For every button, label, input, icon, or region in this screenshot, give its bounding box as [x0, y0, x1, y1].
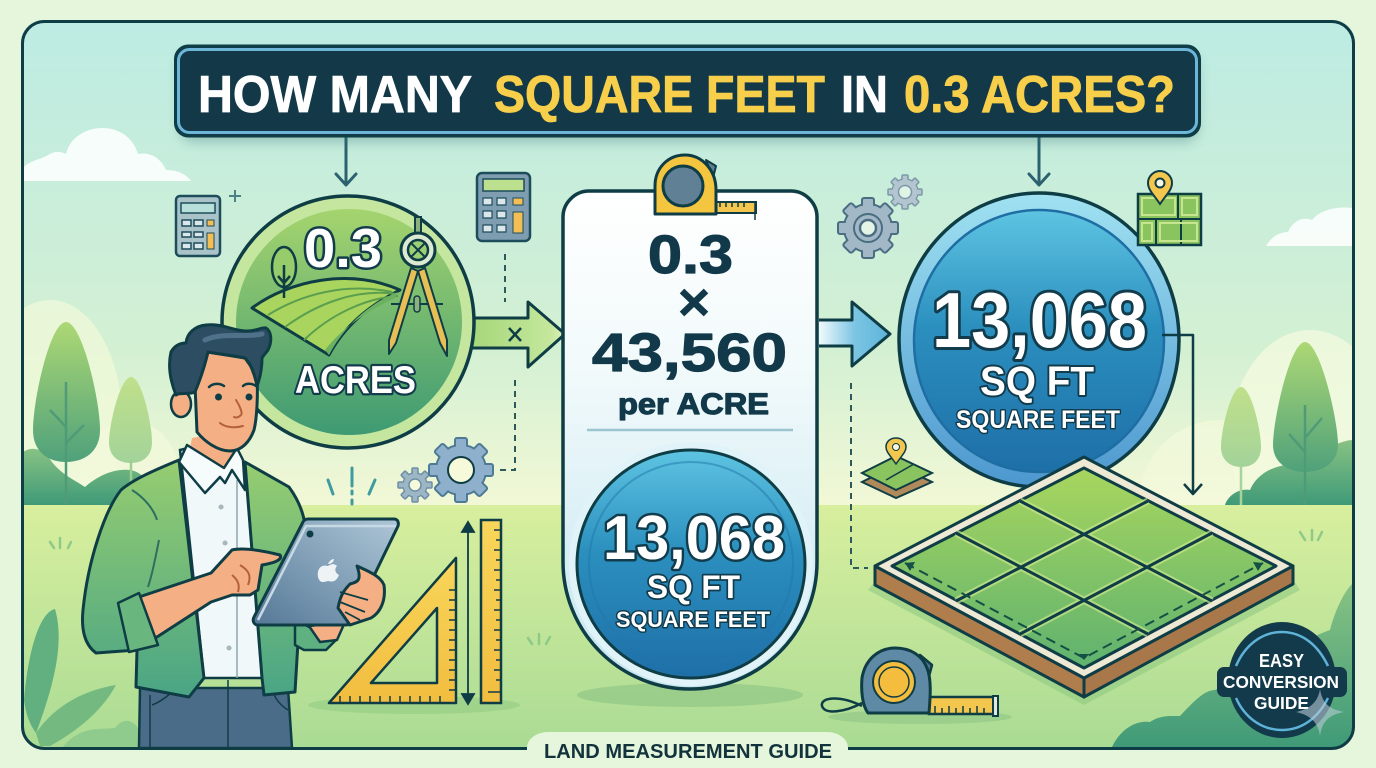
icon: floor tape measure [822, 648, 998, 716]
title text: IN [841, 66, 888, 124]
value 13,068: 13,068 [603, 504, 785, 573]
connector arrow: result to plot [1162, 335, 1202, 494]
unit SQ FT: SQ FT [980, 358, 1094, 404]
icon: top tape measure [655, 155, 756, 220]
unit SQ FT: SQ FT [647, 569, 740, 605]
nose and smile [220, 400, 243, 427]
title text: SQUARE FEET [494, 66, 825, 124]
icon: plus [229, 190, 241, 202]
result circle large [899, 193, 1179, 487]
title banner [176, 46, 1200, 142]
foliage bottom right [1112, 583, 1353, 748]
value 43,560: 43,560 [592, 323, 787, 383]
hills [0, 300, 1376, 580]
apple-style mark [318, 559, 339, 582]
dashed connector: calculator [504, 254, 506, 302]
dashed connector: arrow to gears [498, 380, 515, 470]
badge text: CONVERSION [1223, 672, 1339, 692]
neck [190, 430, 242, 480]
tape measure shadow [828, 710, 1012, 724]
divider [587, 429, 793, 431]
badge: easy conversion guide [1217, 622, 1347, 738]
footer label: LAND MEASUREMENT GUIDE [544, 740, 832, 763]
trees left [23, 322, 160, 505]
second arm [309, 622, 345, 642]
icon: map with pin [1138, 171, 1201, 245]
icon: compass [389, 217, 447, 356]
icon: gear small top [888, 175, 922, 209]
ruler shadow [308, 696, 520, 714]
formula panel shadow [577, 683, 803, 707]
right cuff [295, 620, 336, 650]
connector arrow: title to result [1029, 136, 1049, 185]
grass tufts [50, 530, 1322, 644]
value 0.3: 0.3 [648, 225, 733, 285]
person [83, 325, 398, 748]
icon: map layers [862, 438, 932, 498]
foliage bottom left [24, 609, 139, 748]
icon: calculator left [176, 196, 220, 256]
multiply sign [682, 291, 706, 314]
shirt [180, 445, 262, 678]
ear [171, 391, 191, 417]
cloud right [1266, 208, 1353, 246]
per acre label: per ACRE [618, 388, 769, 421]
value 0.3: 0.3 [304, 217, 382, 279]
dashed connector: to plot [851, 383, 868, 568]
trees right [1221, 342, 1353, 505]
icon: double arrow [462, 522, 474, 704]
emphasis ticks [328, 468, 375, 504]
badge text: GUIDE [1254, 693, 1309, 713]
unit square feet: SQUARE FEET [956, 406, 1120, 434]
connector arrow: title to acres [336, 136, 356, 185]
cuff [118, 593, 158, 652]
icon: field [252, 279, 400, 355]
buttons [221, 507, 229, 648]
icon: small gear [398, 468, 432, 502]
tablet [253, 519, 398, 625]
badge text [1223, 651, 1339, 713]
title text: HOW MANY [198, 66, 472, 124]
result circle [569, 442, 813, 686]
sparkle [1296, 689, 1344, 736]
placket [236, 480, 238, 678]
eyebrows [209, 384, 256, 387]
footer label [527, 732, 848, 768]
jacket creases [132, 490, 159, 587]
icon: tree [272, 247, 296, 298]
icon: set square [329, 558, 456, 703]
formula panel [563, 191, 817, 689]
label ACRES: ACRES [295, 359, 416, 402]
cloud left [23, 128, 191, 181]
jacket [83, 460, 204, 697]
land plot grid [868, 457, 1300, 705]
dashed measure lines [905, 563, 1263, 658]
icon: gear large top [838, 198, 898, 258]
multiply sign on arrow [509, 328, 521, 341]
icon: calculator right [477, 173, 530, 241]
hair [170, 325, 271, 395]
ground [23, 505, 1353, 748]
arm and pointing hand [139, 549, 281, 640]
title text [198, 66, 1175, 124]
arrow: acres to formula [470, 302, 565, 367]
right hand [338, 566, 384, 625]
arrow: formula to result [819, 302, 890, 366]
pants [139, 688, 292, 748]
unit square feet: SQUARE FEET [616, 607, 770, 632]
acres circle [222, 196, 474, 448]
value 13,068: 13,068 [932, 276, 1147, 364]
arrow glow [560, 322, 582, 346]
icon: large gear [429, 438, 493, 502]
title text: 0.3 ACRES? [904, 66, 1175, 124]
collar [179, 445, 245, 493]
badge text: EASY [1259, 651, 1304, 671]
icon: ruler [481, 520, 501, 703]
face [195, 352, 257, 451]
hair highlight [205, 334, 262, 340]
